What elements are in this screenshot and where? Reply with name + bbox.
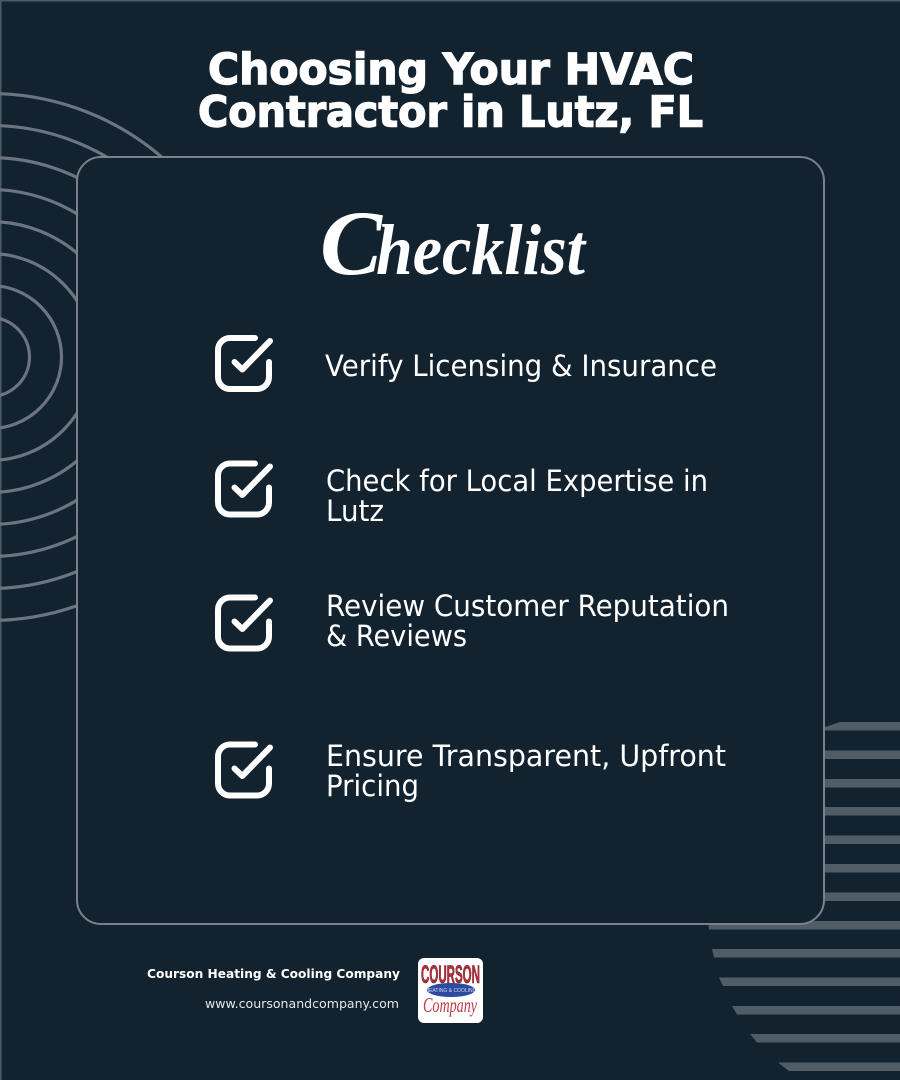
panel: checklist bbox=[77, 157, 824, 924]
logo bbox=[418, 958, 483, 1023]
logo: Company script: Company bbox=[423, 993, 477, 1017]
heading: Checklist: hecklist bbox=[376, 210, 587, 290]
item 1 bbox=[218, 338, 717, 389]
footer website: www.coursonandcompany.com bbox=[205, 997, 399, 1011]
text: item 3: & Reviews bbox=[326, 619, 467, 653]
text: item 3 bbox=[326, 589, 729, 653]
heading: Checklist bbox=[320, 192, 587, 294]
icon: checkbox 3 bbox=[218, 598, 270, 648]
logo: heating and cooling: HEATING & COOLING bbox=[425, 988, 477, 994]
title: Choosing Your HVAC bbox=[208, 45, 694, 95]
text: item 1: Verify Licensing & Insurance bbox=[325, 349, 717, 383]
text: item 2: Lutz bbox=[326, 494, 384, 528]
icon: checkbox 4 bbox=[218, 744, 270, 796]
text: item 2: Check for Local Expertise in bbox=[326, 464, 708, 498]
footer company name: Courson Heating & Cooling Company bbox=[147, 966, 400, 981]
text: item 4: Pricing bbox=[326, 769, 419, 803]
heading: Checklist: C bbox=[320, 192, 384, 294]
title: Contractor in Lutz, FL bbox=[198, 88, 703, 138]
text: item 4: Ensure Transparent, Upfront bbox=[326, 739, 726, 773]
item 4 bbox=[218, 739, 726, 803]
logo: blue oval bbox=[427, 983, 475, 997]
item 3 bbox=[218, 589, 729, 653]
icon: checkbox 1 bbox=[218, 338, 270, 389]
infographic canvas: COURSON bbox=[421, 961, 480, 989]
icon: checkbox 2 bbox=[218, 464, 270, 514]
title bbox=[198, 45, 703, 138]
decorative concentric circles bbox=[0, 94, 254, 620]
decorative stripes bbox=[708, 722, 900, 1071]
item 2 bbox=[218, 464, 708, 528]
text: item 2 bbox=[326, 464, 708, 528]
text: item 4 bbox=[326, 739, 726, 803]
text: item 3: Review Customer Reputation bbox=[326, 589, 729, 623]
